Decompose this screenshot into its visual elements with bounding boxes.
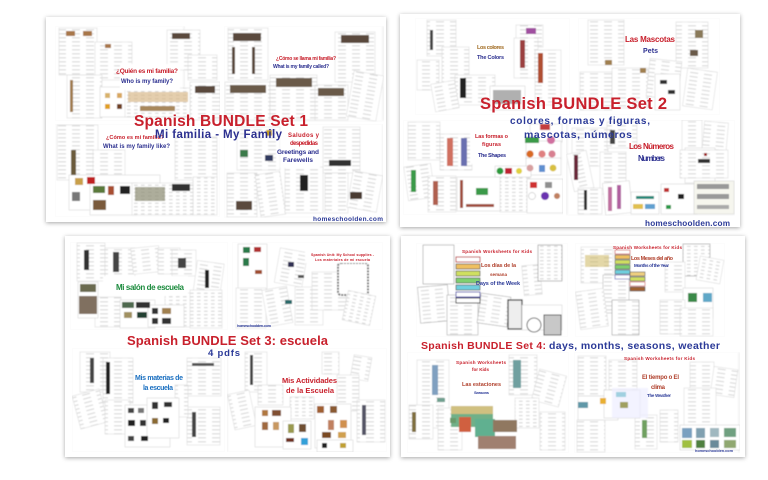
panel: Numbers bbox=[566, 120, 735, 215]
subpanel labels: set 1: What is my family called? bbox=[273, 64, 329, 70]
subpanel labels: set 2: Las formas o bbox=[475, 134, 509, 140]
title: Spanish BUNDLE Set 4: days, months, seasons, weather bbox=[549, 340, 720, 352]
subpanel labels: set 2: Los colores bbox=[477, 45, 504, 51]
panel: Who is my family bbox=[55, 26, 220, 121]
subpanel labels: set 3: Spanish Unit: My School supplies - bbox=[311, 253, 375, 257]
subpanel labels: set 3: Mis materias de bbox=[135, 375, 183, 382]
subpanel labels: set 3 bbox=[116, 253, 375, 395]
subpanel labels: set 4: Spanish Worksheets for Kids bbox=[613, 245, 682, 250]
subtitle: colores, formas y figuras, mascotas, números bbox=[510, 116, 650, 141]
subpanel labels: set 2: The Colors bbox=[477, 55, 504, 61]
subpanel labels: set 4: Los días de la bbox=[481, 263, 517, 269]
panel: The Weather bbox=[574, 352, 740, 453]
subpanel labels: set 4: semana bbox=[490, 272, 507, 277]
subpanel labels: set 2: Pets bbox=[643, 48, 658, 55]
subtitle: 4 pdfs: 4 pdfs bbox=[208, 348, 240, 359]
subpanel labels: set 1: Saludos y bbox=[288, 133, 320, 139]
panel: Seasons bbox=[407, 352, 569, 453]
subtitle: colores, formas y figuras, mascotas, números: mascotas, números bbox=[524, 129, 632, 141]
panel: Mis materias de la escuela bbox=[72, 348, 225, 452]
subpanel labels: set 1: despedidas bbox=[290, 141, 319, 147]
panel: school supplies bbox=[232, 242, 383, 330]
panel: Days of the Week bbox=[416, 243, 568, 337]
title: Spanish BUNDLE Set 3: Spanish BUNDLE Set 3: escuela bbox=[127, 333, 329, 348]
subpanel labels: set 2: Las Mascotas bbox=[625, 35, 676, 44]
subpanel labels: set 1: Farewells bbox=[283, 157, 313, 164]
subpanel labels: set 4: Las estaciones bbox=[462, 382, 501, 388]
subpanel labels: set 1: ¿Cómo se llama mi familia? bbox=[276, 56, 336, 62]
title: Spanish BUNDLE Set 2: Spanish BUNDLE Set 2 bbox=[480, 95, 667, 113]
panel: Months of the Year bbox=[575, 243, 725, 337]
subpanel labels: set 3: Mis Actividades bbox=[282, 376, 337, 385]
subpanel labels: set 4: Los Meses del año bbox=[631, 256, 674, 262]
panel: The Shapes bbox=[403, 120, 563, 215]
subpanel labels: set 1: ¿Quién es mi familia? bbox=[116, 68, 178, 75]
subpanel labels: set 2: Numbers bbox=[638, 154, 666, 163]
subpanel labels: set 1: Greetings and bbox=[277, 149, 319, 156]
subpanel labels: set 1: Who is my family? bbox=[121, 79, 173, 85]
panel: Greetings and Farewells bbox=[224, 124, 383, 217]
subpanel labels: set 4: El tiempo o El bbox=[642, 375, 679, 381]
subtitle: Mi familia - My Family: Mi familia - My Family bbox=[155, 129, 283, 141]
subpanel labels: set 4: clima bbox=[651, 385, 666, 391]
card: Spanish bundle set 3 bbox=[65, 236, 390, 457]
subpanel labels: set 4: The Weather bbox=[647, 393, 671, 398]
subpanel labels: set 3: de la Escuela bbox=[286, 386, 335, 395]
panel: Mis Actividades de la Escuela bbox=[227, 348, 387, 452]
subpanel labels: set 1 bbox=[103, 56, 336, 164]
subtitle: colores, formas y figuras, mascotas, números: colores, formas y figuras, bbox=[510, 116, 650, 127]
title: Spanish BUNDLE Set 1: Spanish BUNDLE Set 1 bbox=[134, 113, 308, 130]
card: Spanish bundle set 1 bbox=[46, 17, 386, 223]
watermark: set 2: homeschoolden.com bbox=[645, 219, 730, 228]
subpanel labels: set 3: Mi salón de escuela bbox=[116, 283, 185, 292]
subpanel labels: set 1: What is my family like? bbox=[103, 144, 170, 150]
subpanel labels: set 3: la escuela bbox=[143, 385, 173, 392]
card: Spanish bundle set 2 bbox=[400, 14, 740, 228]
subpanel labels: set 4: Days of the Week bbox=[476, 281, 521, 287]
subpanel labels: set 2: figuras bbox=[482, 142, 501, 148]
watermark: set 3: homeschoolden.com bbox=[237, 324, 272, 328]
subpanel labels: set 4 bbox=[456, 245, 695, 398]
subpanel labels: set 4: Spanish Worksheets for Kids bbox=[624, 356, 695, 361]
card: Spanish bundle set 4 bbox=[401, 236, 745, 457]
panel: What is my family called bbox=[224, 26, 384, 121]
title: Spanish BUNDLE Set 4 bbox=[421, 340, 720, 352]
subpanel labels: set 4: for Kids bbox=[472, 367, 489, 372]
panel: The Colors bbox=[415, 18, 570, 115]
panel: Mi salón de escuela bbox=[70, 242, 228, 330]
subpanel labels: set 2 bbox=[475, 35, 676, 163]
subpanel labels: set 4: Months of the Year bbox=[634, 263, 669, 268]
subpanel labels: set 2: The Shapes bbox=[478, 153, 506, 159]
subpanel labels: set 4: Spanish Worksheets for Kids bbox=[462, 249, 532, 254]
subpanel labels: set 1: ¿Cómo es mi familia? bbox=[106, 135, 165, 141]
subpanel labels: set 3: Los materiales de mi escuela bbox=[315, 258, 371, 262]
watermark: set 4: homeschoolden.com bbox=[695, 449, 734, 453]
watermark: set 1: homeschoolden.com bbox=[313, 216, 383, 223]
panel: Pets bbox=[578, 18, 720, 115]
subpanel labels: set 2: Los Números bbox=[629, 142, 675, 151]
subpanel labels: set 4: Spanish Worksheets bbox=[456, 360, 506, 365]
title: Spanish BUNDLE Set 4: Spanish BUNDLE Set 4: bbox=[421, 340, 546, 352]
subpanel labels: set 4: Seasons bbox=[474, 390, 490, 395]
panel: What is my family like bbox=[55, 124, 220, 217]
